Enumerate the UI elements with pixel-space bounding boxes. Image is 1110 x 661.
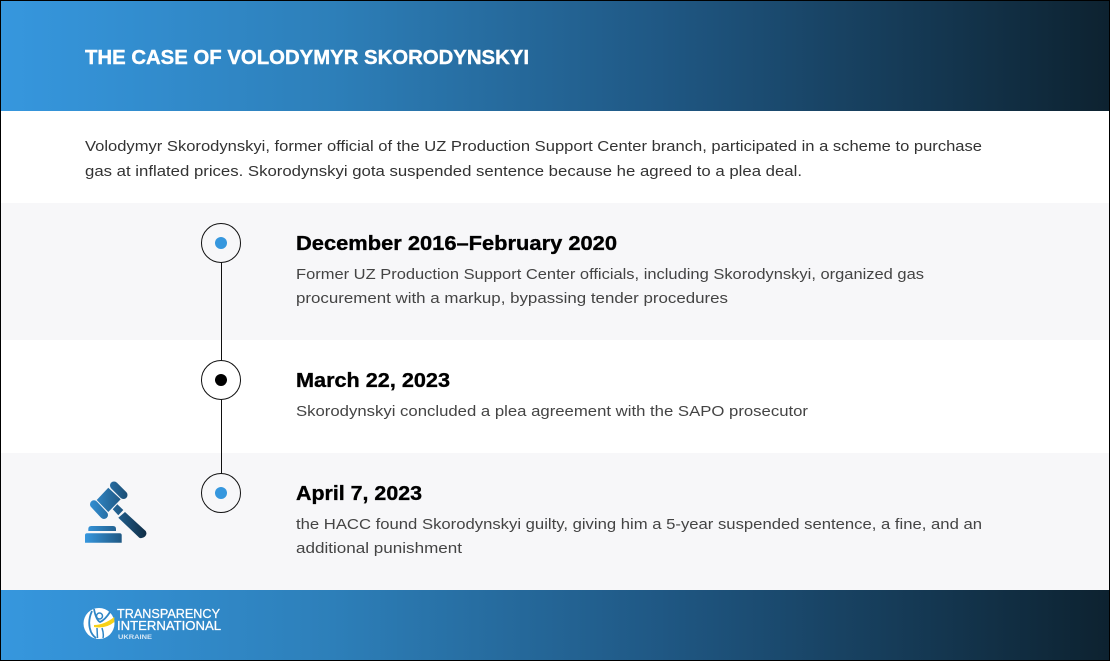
marker: third date bbox=[202, 474, 240, 512]
logo wordmark: UKRAINE bbox=[118, 634, 153, 641]
heading: April 7, 2023: April 7, 2023 bbox=[296, 482, 422, 505]
logo wordmark: TRANSPARENCY bbox=[117, 607, 221, 621]
logo wordmark: INTERNATIONAL bbox=[117, 619, 221, 633]
icon: judge gavel bbox=[85, 486, 146, 543]
description: gas procurement bbox=[296, 266, 924, 307]
description: HACC verdict bbox=[296, 516, 982, 557]
marker: second date bbox=[202, 360, 240, 400]
header band bbox=[1, 1, 1109, 111]
marker: first date bbox=[202, 224, 240, 262]
intro text bbox=[85, 138, 982, 180]
heading: March 22, 2023: March 22, 2023 bbox=[296, 369, 450, 392]
intro text: Volodymyr Skorodynskyi, former official of the UZ Production Support Center branch, participated in a scheme to purchase bbox=[85, 138, 982, 155]
description: gas procurement: procurement with a markup, bypassing tender procedures bbox=[296, 290, 728, 307]
description: HACC verdict: the HACC found Skorodynskyi guilty, giving him a 5-year suspended sentence, a fine, and an bbox=[296, 516, 982, 533]
description: plea agreement: Skorodynskyi concluded a plea agreement with the SAPO prosecutor bbox=[296, 403, 808, 420]
description: HACC verdict: additional punishment bbox=[296, 540, 463, 557]
footer band bbox=[1, 590, 1109, 660]
logo: Transparency International Ukraine bbox=[84, 607, 221, 641]
description: gas procurement: Former UZ Production Support Center officials, including Skorodynskyi, organized gas bbox=[296, 266, 924, 283]
panel: April 7, 2023 bbox=[1, 453, 1109, 590]
intro text: gas at inflated prices. Skorodynskyi gota suspended sentence because he agreed to a plea deal. bbox=[85, 163, 802, 180]
title: THE CASE OF VOLODYMYR SKORODYNSKYI bbox=[85, 46, 529, 69]
timeline bbox=[202, 224, 240, 512]
logo globe bbox=[84, 608, 114, 639]
panel: December 2016–February 2020 bbox=[1, 203, 1109, 340]
logo wordmark bbox=[117, 607, 221, 641]
panel: March 22, 2023 bbox=[1, 340, 1109, 453]
heading: December 2016–February 2020: December 2016–February 2020 bbox=[296, 232, 617, 255]
